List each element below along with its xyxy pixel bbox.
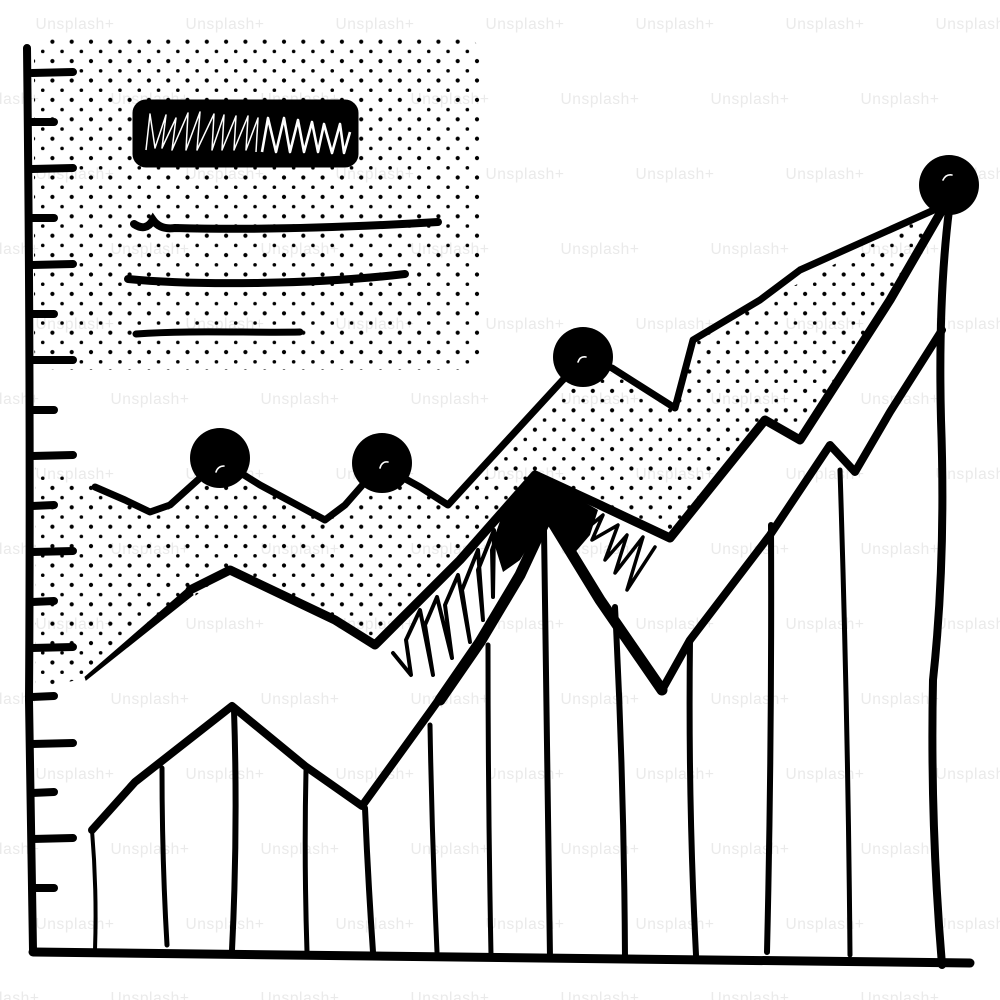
watermark text: Unsplash+ xyxy=(110,541,190,558)
watermark text: Unsplash+ xyxy=(185,166,265,183)
watermark text: Unsplash+ xyxy=(860,841,940,858)
watermark text: Unsplash+ xyxy=(785,166,865,183)
watermark text: Unsplash+ xyxy=(860,391,940,408)
watermark text: Unsplash+ xyxy=(110,241,190,258)
watermark text: Unsplash+ xyxy=(260,241,340,258)
watermark text: Unsplash+ xyxy=(35,466,115,483)
watermark text: Unsplash+ xyxy=(35,616,115,633)
y axis ticks xyxy=(32,72,73,888)
watermark text: Unsplash+ xyxy=(485,766,565,783)
band lower edge taper xyxy=(85,586,193,680)
watermark text: Unsplash+ xyxy=(110,691,190,708)
watermark text: Unsplash+ xyxy=(635,16,715,33)
watermark text: Unsplash+ xyxy=(410,241,490,258)
watermark text: Unsplash+ xyxy=(635,316,715,333)
watermark text: Unsplash+ xyxy=(335,166,415,183)
watermark text: Unsplash+ xyxy=(635,466,715,483)
watermark text: Unsplash+ xyxy=(35,16,115,33)
watermark text: Unsplash+ xyxy=(710,391,790,408)
watermark text: Unsplash+ xyxy=(710,691,790,708)
scribble shading: right slope xyxy=(585,515,655,590)
watermark text: Unsplash+ xyxy=(560,91,640,108)
watermark text: Unsplash+ xyxy=(485,916,565,933)
watermark text: Unsplash+ xyxy=(335,916,415,933)
watermark text: Unsplash+ xyxy=(35,316,115,333)
watermark text: Unsplash+ xyxy=(110,91,190,108)
watermark text: Unsplash+ xyxy=(860,241,940,258)
watermark text: Unsplash+ xyxy=(110,391,190,408)
watermark text: Unsplash+ xyxy=(185,916,265,933)
right vertical line xyxy=(932,210,949,965)
watermark text: Unsplash+ xyxy=(335,316,415,333)
watermark text: Unsplash+ xyxy=(335,16,415,33)
y axis xyxy=(27,48,33,950)
watermark text: Unsplash+ xyxy=(335,766,415,783)
watermark text: Unsplash+ xyxy=(785,766,865,783)
watermark text: Unsplash+ xyxy=(560,841,640,858)
scribble shading: dense peak xyxy=(493,472,598,572)
marker highlights xyxy=(216,175,952,472)
watermark text: Unsplash+ xyxy=(485,466,565,483)
watermark text: Unsplash+ xyxy=(410,691,490,708)
watermark text: Unsplash+ xyxy=(410,91,490,108)
watermark text: Unsplash+ xyxy=(485,166,565,183)
watermark text: Unsplash+ xyxy=(35,766,115,783)
watermark text: Unsplash+ xyxy=(785,16,865,33)
band lower edge line xyxy=(190,205,945,645)
watermark text: Unsplash+ xyxy=(785,466,865,483)
watermark text: Unsplash+ xyxy=(710,91,790,108)
watermark text: Unsplash+ xyxy=(35,166,115,183)
x axis xyxy=(33,952,970,963)
watermark text: Unsplash+ xyxy=(635,616,715,633)
watermark text: Unsplash+ xyxy=(485,16,565,33)
watermark text: Unsplash+ xyxy=(635,766,715,783)
watermark text: Unsplash+ xyxy=(260,841,340,858)
watermark text: Unsplash+ xyxy=(185,316,265,333)
vertical bars under the lower line xyxy=(92,470,850,958)
watermark text: Unsplash+ xyxy=(860,541,940,558)
watermark text: Unsplash+ xyxy=(35,916,115,933)
watermark text: Unsplash+ xyxy=(635,916,715,933)
panel: dotted legend background xyxy=(34,34,480,370)
scribble shading: left slope xyxy=(393,510,506,675)
data point markers xyxy=(190,155,979,493)
watermark text: Unsplash+ xyxy=(710,841,790,858)
watermark text: Unsplash+ xyxy=(560,391,640,408)
watermark text: Unsplash+ xyxy=(260,391,340,408)
watermark text: Unsplash+ xyxy=(185,766,265,783)
watermark text: Unsplash+ xyxy=(710,241,790,258)
watermark text: Unsplash+ xyxy=(635,166,715,183)
watermark text: Unsplash+ xyxy=(335,616,415,633)
watermark text: Unsplash+ xyxy=(560,541,640,558)
watermark text: Unsplash+ xyxy=(185,466,265,483)
watermark text: Unsplash+ xyxy=(260,541,340,558)
watermark text: Unsplash+ xyxy=(560,691,640,708)
area: dotted band under the upper line xyxy=(35,205,945,690)
watermark text: Unsplash+ xyxy=(410,391,490,408)
legend line 2 xyxy=(128,274,405,283)
upper trend line with markers xyxy=(95,205,945,520)
watermark text: Unsplash+ xyxy=(785,916,865,933)
watermark text: Unsplash+ xyxy=(560,241,640,258)
legend title scribble xyxy=(136,103,355,164)
legend line 1 xyxy=(134,220,438,229)
watermark text: Unsplash+ xyxy=(185,616,265,633)
watermark text: Unsplash+ xyxy=(410,541,490,558)
watermark text: Unsplash+ xyxy=(485,316,565,333)
watermark text: Unsplash+ xyxy=(710,541,790,558)
watermark text: Unsplash+ xyxy=(110,841,190,858)
watermark text: Unsplash+ xyxy=(260,91,340,108)
lower trend line xyxy=(92,330,942,830)
watermark text: Unsplash+ xyxy=(260,691,340,708)
watermark text: Unsplash+ xyxy=(860,91,940,108)
watermark text: Unsplash+ xyxy=(785,616,865,633)
watermark text: Unsplash+ xyxy=(785,316,865,333)
watermark text: Unsplash+ xyxy=(485,616,565,633)
watermark text: Unsplash+ xyxy=(410,841,490,858)
legend line 3 xyxy=(136,332,300,334)
watermark text: Unsplash+ xyxy=(335,466,415,483)
watermark text: Unsplash+ xyxy=(860,691,940,708)
lower trend line peak thickening xyxy=(440,515,662,700)
watermark text: Unsplash+ xyxy=(185,16,265,33)
